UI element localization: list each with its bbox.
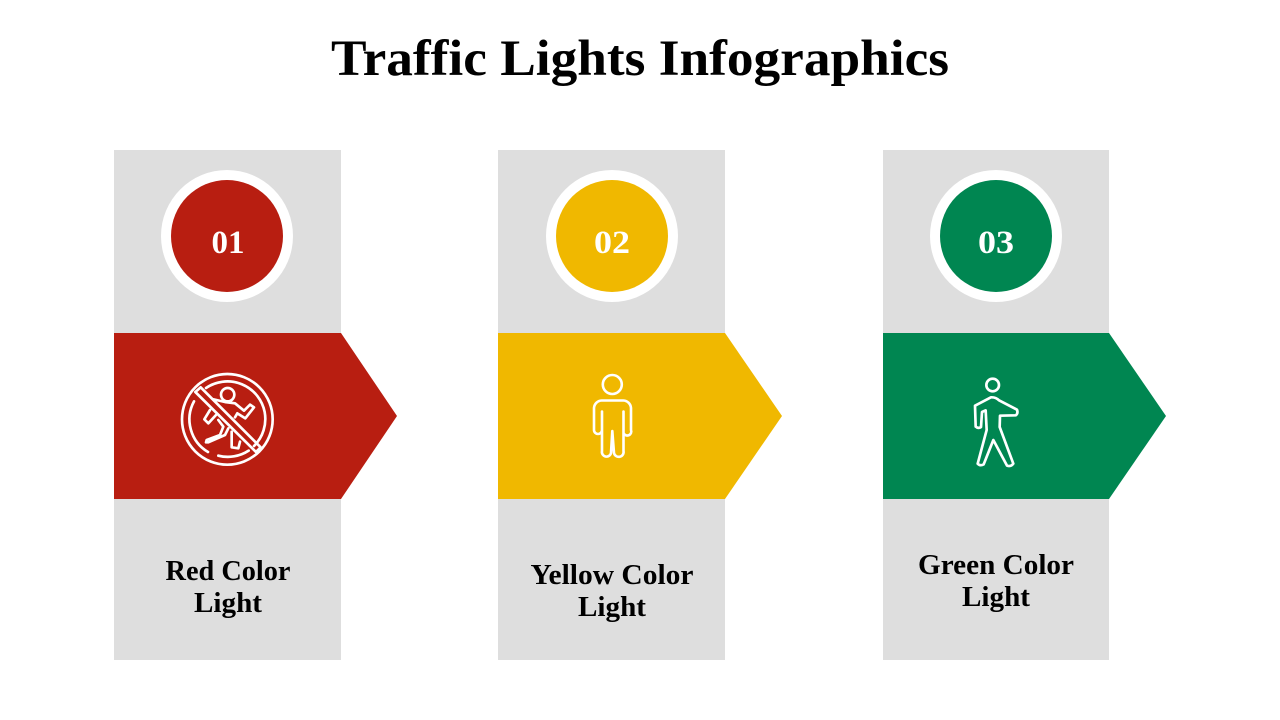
- panel background: [498, 150, 725, 660]
- number badge 03: [930, 170, 1062, 302]
- number badge 03: 03: [978, 225, 1014, 261]
- label: red color light: Red Color: [166, 556, 290, 587]
- label: green color light: [918, 550, 1074, 613]
- label: red color light: [166, 556, 290, 619]
- number badge 01: 01: [212, 225, 244, 261]
- number badge 02: 02: [594, 225, 630, 261]
- number badge 02: [546, 170, 678, 302]
- panel: red light: [114, 150, 397, 660]
- arrow: red: [114, 333, 397, 499]
- label: green color light: Light: [962, 582, 1031, 613]
- panel: green light: [883, 150, 1166, 660]
- label: yellow color light: Yellow Color: [530, 560, 694, 591]
- icon: standing person: [594, 375, 631, 457]
- label: green color light: Green Color: [918, 550, 1074, 581]
- arrow: yellow: [498, 333, 782, 499]
- panel: yellow light: [498, 150, 782, 660]
- number badge 01: [161, 170, 293, 302]
- label: red color light: Light: [194, 588, 263, 619]
- panel background: [114, 150, 341, 660]
- label: yellow color light: [530, 560, 694, 623]
- label: yellow color light: Light: [578, 592, 647, 623]
- title: Traffic Lights Infographics: [331, 31, 949, 87]
- panel background: [883, 150, 1109, 660]
- icon: no running: [182, 374, 273, 465]
- arrow: green: [883, 333, 1166, 499]
- icon: walking person: [975, 379, 1017, 466]
